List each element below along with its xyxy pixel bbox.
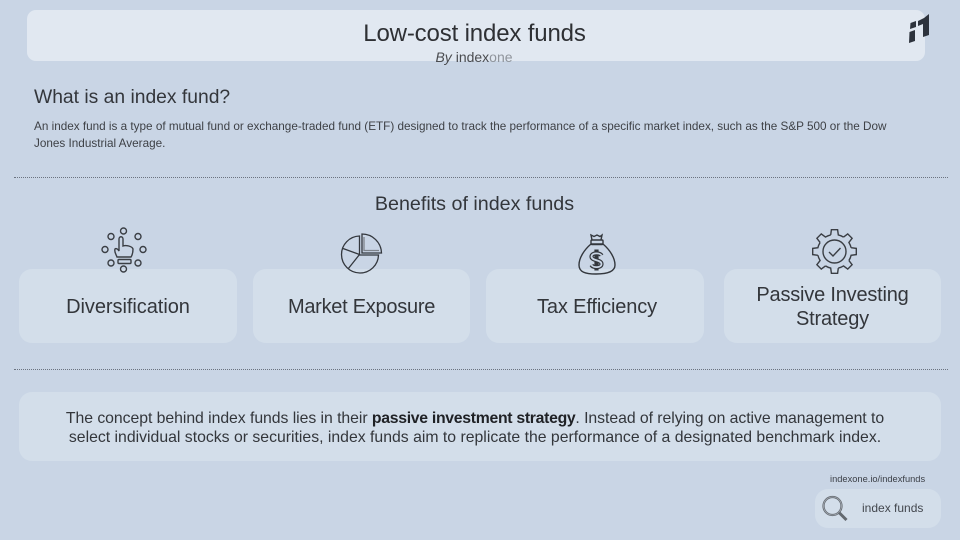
definition text: An index fund is a type of mutual fund or exchange-traded fund (ETF) designed to track the performance of a specific market index, such as the S&P 500 or the Dow	[34, 120, 886, 133]
callout: passive strategy	[19, 392, 941, 461]
link text: indexone.io/indexfunds	[830, 474, 925, 484]
definition text	[34, 120, 886, 150]
card: market exposure: Market Exposure	[288, 296, 435, 318]
card: market exposure	[253, 269, 470, 343]
card: passive investing strategy: Passive Investing	[756, 284, 909, 306]
title: Low-cost index funds	[363, 20, 586, 47]
icon: gear with check	[812, 229, 857, 274]
icon: pie chart	[340, 233, 382, 274]
search box	[815, 489, 941, 528]
card: passive investing strategy: Strategy	[796, 308, 869, 330]
card: passive investing strategy	[724, 269, 941, 343]
icon: money bag	[578, 234, 616, 275]
search box: index funds	[862, 501, 923, 515]
definition text: Jones Industrial Average.	[34, 137, 165, 150]
logo	[909, 14, 929, 43]
card: tax efficiency	[486, 269, 704, 343]
callout: passive strategy: select individual stocks or securities, index funds aim to replicate the performance of a designated benchmark index.	[69, 429, 881, 446]
icon: magnifier	[822, 496, 848, 521]
byline: By indexone	[435, 49, 513, 65]
header banner	[27, 10, 925, 61]
card: tax efficiency: Tax Efficiency	[537, 296, 657, 318]
card: diversification: Diversification	[66, 296, 190, 318]
card: diversification	[19, 269, 237, 343]
icon: hand with circles	[101, 227, 147, 273]
heading: benefits: Benefits of index funds	[375, 193, 574, 215]
heading: what is an index fund: What is an index fund?	[34, 87, 230, 108]
callout: passive strategy: The concept behind index funds lies in their passive investment strategy. Instead of relying on active management to	[66, 410, 884, 427]
